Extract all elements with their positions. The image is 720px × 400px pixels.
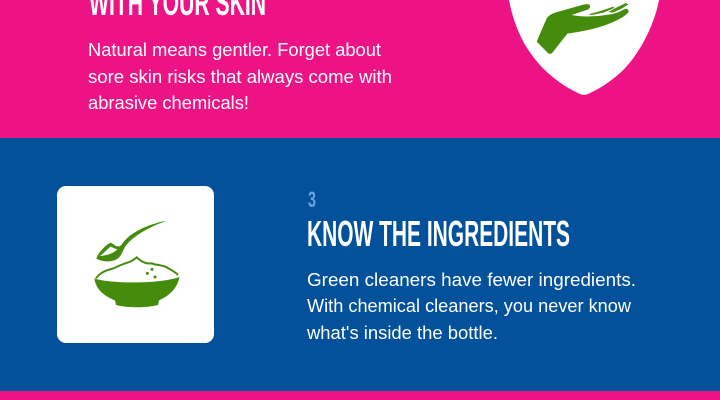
text block: green cleaners: With chemical cleaners, you never know xyxy=(307,296,632,316)
panel: pink skin section xyxy=(0,0,720,138)
text block: natural means gentler xyxy=(88,40,392,113)
text block: natural means gentler: Natural means gentler. Forget about xyxy=(88,40,381,60)
number: 3: 3 xyxy=(308,187,316,212)
text block: green cleaners: Green cleaners have fewer ingredients. xyxy=(307,270,636,290)
panel: pink bottom strip xyxy=(0,391,720,400)
panel: blue ingredients section xyxy=(0,138,720,391)
text block: green cleaners: what's inside the bottle. xyxy=(306,323,498,343)
text block: natural means gentler: abrasive chemicals! xyxy=(88,93,249,113)
icon: shield with hand xyxy=(509,0,659,95)
icon: open hand xyxy=(537,3,629,54)
text block: green cleaners xyxy=(306,270,636,343)
text block: natural means gentler: sore skin risks that always come with xyxy=(88,67,392,87)
card: white icon card xyxy=(57,186,214,343)
icon: spoon and bowl xyxy=(94,221,179,307)
